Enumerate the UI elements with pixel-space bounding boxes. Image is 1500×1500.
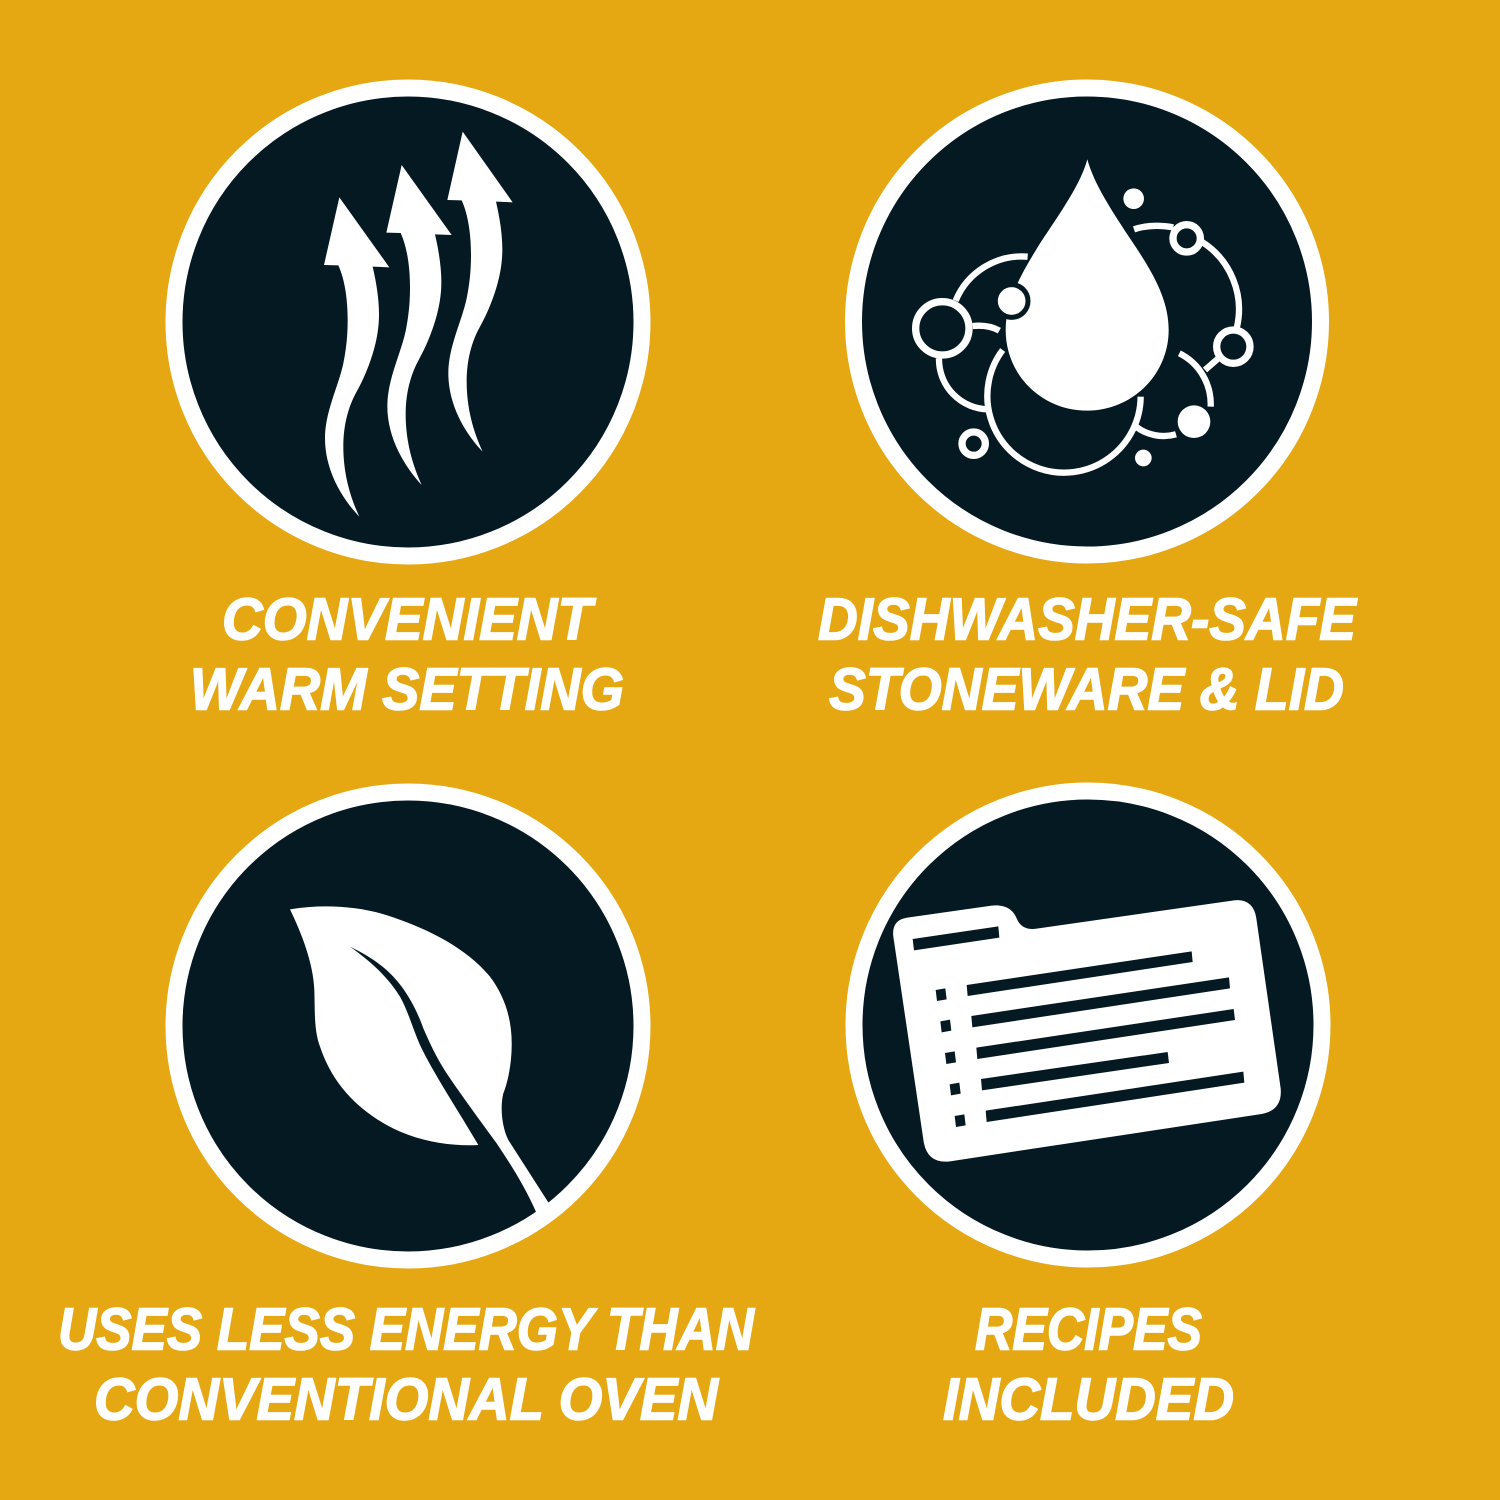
icon: rising heat arrows: [324, 132, 513, 517]
panel: convenient warm setting: [174, 88, 642, 722]
drop: [1006, 159, 1169, 411]
panel: recipes included: [854, 791, 1322, 1432]
heading: recipes included: [943, 1296, 1234, 1432]
heading: convenient warm setting: WARM SETTING: [190, 656, 624, 722]
badge: recipes circle: [854, 791, 1322, 1259]
panel: dishwasher-safe stoneware and lid: [818, 88, 1358, 722]
panel: uses less energy: [58, 792, 755, 1432]
badge: heat circle: [174, 88, 642, 556]
heading: dishwasher-safe stoneware and lid: [818, 586, 1358, 722]
icon: leaf: [290, 906, 550, 1213]
heading: recipes included: INCLUDED: [943, 1366, 1234, 1432]
bubble dots: [995, 188, 1210, 466]
heading: uses less energy than conventional oven: USES LESS ENERGY THAN: [58, 1296, 755, 1362]
icon: water drop with bubbles: [916, 159, 1250, 473]
bubble rings: [916, 225, 1250, 455]
heading: dishwasher-safe stoneware and lid: DISHWASHER-SAFE: [818, 586, 1358, 652]
folder body: [893, 900, 1281, 1162]
badge: dishwasher circle: [854, 88, 1320, 555]
heading: recipes included: RECIPES: [975, 1296, 1202, 1362]
badge: energy circle: [174, 792, 642, 1260]
icon: recipe folder: [893, 900, 1281, 1162]
heading: convenient warm setting: [190, 586, 624, 722]
heading: convenient warm setting: CONVENIENT: [222, 586, 597, 652]
bubble arcs: [939, 226, 1239, 473]
heading: uses less energy than conventional oven: [58, 1296, 755, 1432]
heading: uses less energy than conventional oven: CONVENTIONAL OVEN: [94, 1366, 719, 1432]
heading: dishwasher-safe stoneware and lid: STONEWARE & LID: [829, 656, 1344, 722]
folder lines: [913, 926, 1244, 1127]
